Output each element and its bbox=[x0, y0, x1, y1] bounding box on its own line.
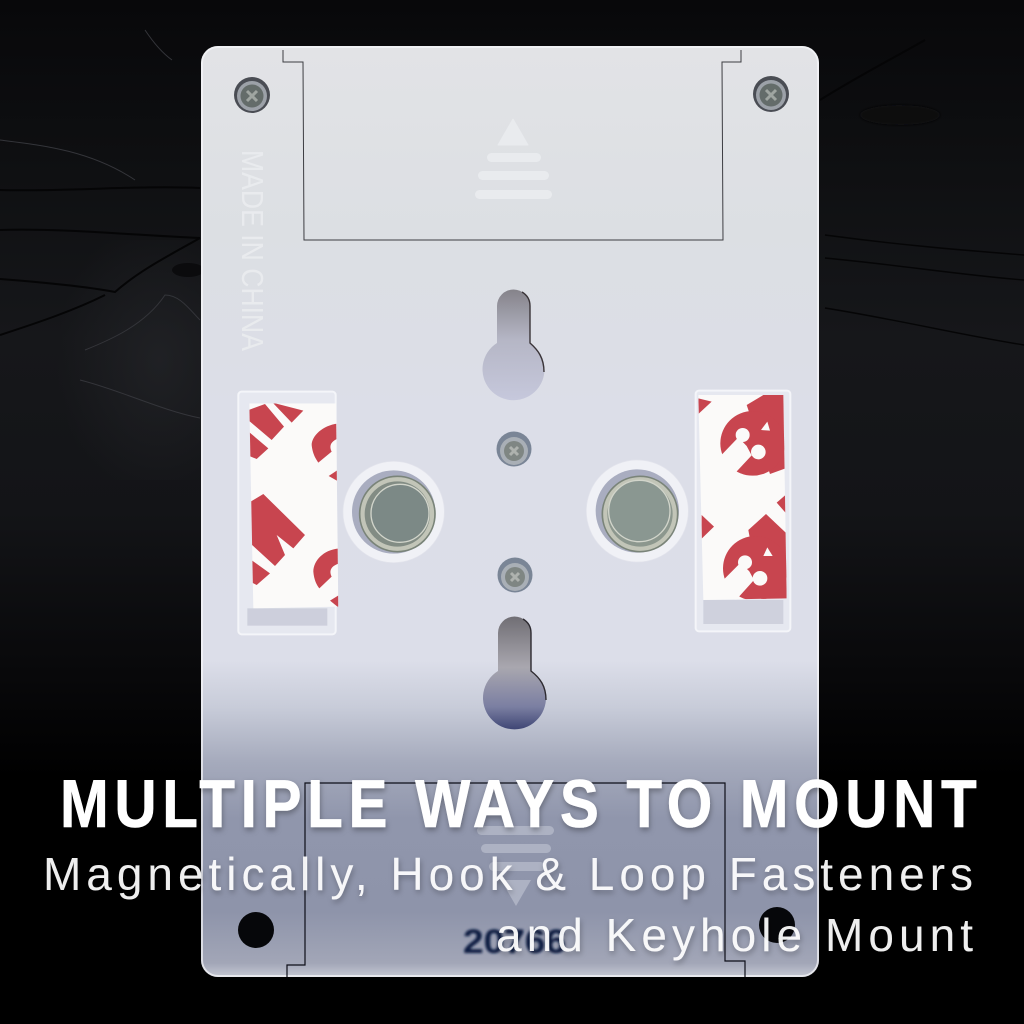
upper 3M logo bbox=[698, 395, 790, 476]
bottom left screw hole bbox=[238, 912, 274, 948]
top keyhole bbox=[482, 290, 544, 400]
top left screw bbox=[234, 77, 270, 113]
top battery cover bbox=[283, 50, 741, 240]
right tape holder bbox=[696, 391, 790, 631]
headline: MULTIPLE WAYS TO MOUNT bbox=[60, 767, 977, 842]
left magnet bbox=[343, 461, 444, 563]
product body bbox=[201, 46, 819, 977]
left 3M tape bbox=[247, 400, 342, 610]
subheading bbox=[43, 848, 973, 961]
left adhesive strip and magnet bbox=[238, 392, 444, 634]
center upper screw bbox=[496, 432, 532, 466]
arrow marking: up bbox=[475, 119, 552, 199]
printed model number: 20766 bbox=[463, 923, 566, 961]
engraved text: made in china: MADE IN CHINA bbox=[235, 150, 270, 351]
subheading line 2: and Keyhole Mount bbox=[496, 909, 973, 961]
lower 3M logo bbox=[723, 514, 787, 600]
left tape holder bbox=[238, 392, 336, 634]
right 3M tape bbox=[697, 393, 790, 602]
right adhesive strip and magnet bbox=[586, 391, 790, 631]
arrow marking: down bbox=[477, 826, 554, 906]
subheading line 1: Magnetically, Hook & Loop Fasteners bbox=[43, 848, 973, 900]
bottom battery cover bbox=[287, 783, 745, 977]
bottom keyhole bbox=[483, 616, 546, 729]
center lower screw bbox=[498, 558, 532, 592]
right magnet bbox=[586, 460, 688, 562]
bottom right screw hole bbox=[759, 907, 795, 943]
top right screw bbox=[753, 76, 789, 112]
